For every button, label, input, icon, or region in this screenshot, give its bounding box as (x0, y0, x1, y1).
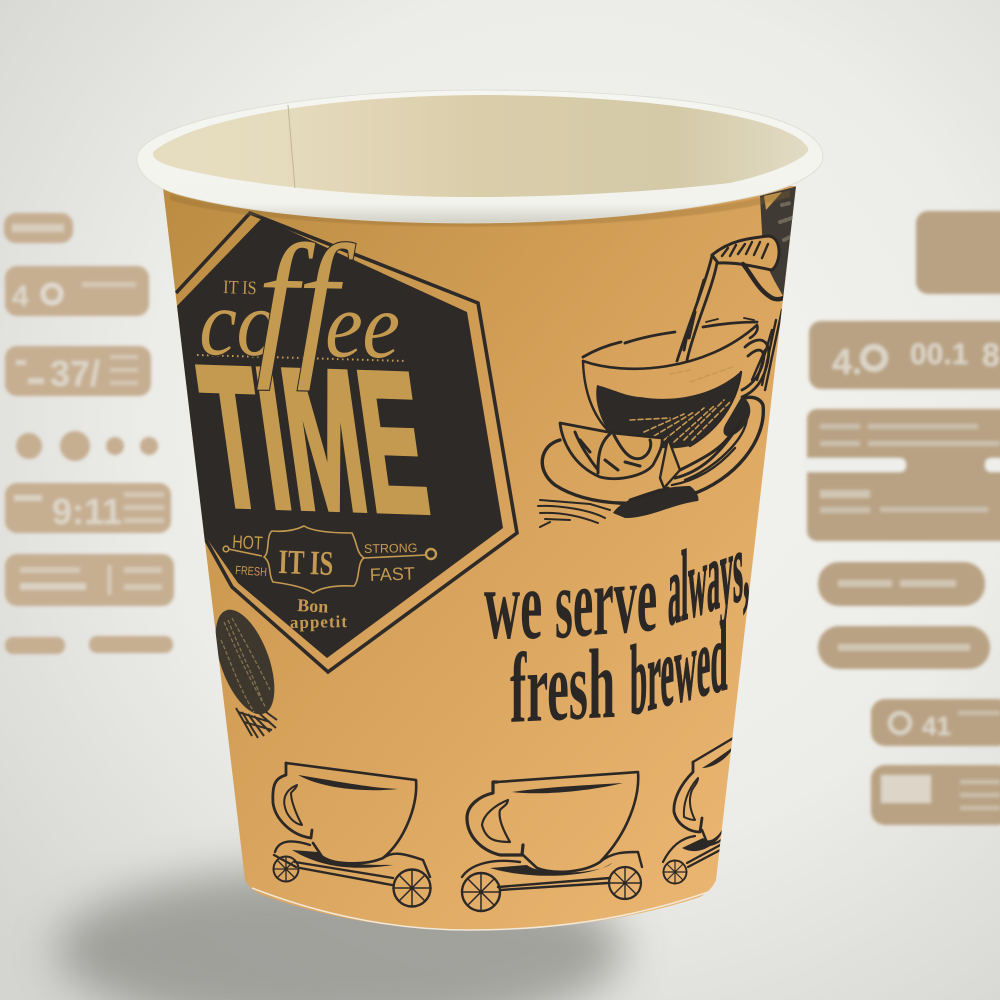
connector line right (364, 555, 426, 558)
cup handle (742, 340, 769, 397)
label: number 37 (5, 346, 151, 396)
right column of blurred labels (800, 211, 1000, 825)
spout hatching (722, 242, 768, 258)
label: large figures: 00.1 (910, 338, 968, 371)
icon: coffee bean (216, 610, 278, 738)
coffee line (702, 746, 734, 768)
bowl outline (286, 763, 416, 863)
saucer shadow (490, 863, 612, 876)
label: number 11: 9:11 (52, 491, 122, 532)
coffee line (512, 783, 623, 793)
bean engraving (221, 618, 270, 712)
bean tail hatching (236, 708, 277, 738)
label: text block with white bar (800, 409, 1000, 541)
wheel left (274, 856, 298, 882)
cup bottom edge highlight (252, 888, 708, 930)
illustration: coffee poured into cup (538, 186, 798, 527)
pitcher spout (712, 236, 779, 270)
cup icon on wheels: left (273, 763, 430, 906)
shading by the cup edge (752, 310, 782, 390)
shadow under the rim (170, 190, 790, 227)
small ribbon badge (223, 526, 436, 593)
paper cup (137, 90, 823, 930)
coffee highlights (630, 366, 735, 442)
wheel right (394, 870, 430, 906)
word: serve: serve (555, 541, 657, 660)
saucer dark band (723, 396, 750, 436)
dotted divider (197, 355, 406, 361)
pitcher speckle (780, 203, 792, 240)
label: number 11 (5, 483, 171, 533)
pouring stream (677, 256, 717, 361)
pitcher opening (764, 192, 782, 210)
saucer inner line (672, 418, 747, 485)
text: TIME: TIME (190, 325, 438, 556)
word: brewed: brewed (630, 601, 728, 738)
handle outer (674, 762, 702, 832)
pitcher body (760, 186, 798, 300)
pill: caption two (818, 626, 990, 669)
label: two text columns (5, 554, 174, 606)
handle outer (273, 763, 312, 838)
cup shadow on the table (55, 866, 625, 1000)
text: coffee: coffee (198, 211, 402, 393)
text: HOT: HOT (232, 531, 263, 554)
handle outer (467, 782, 523, 855)
word: we: we (484, 551, 542, 661)
two small pills (5, 636, 173, 654)
label: icon and caption: 4 (12, 280, 29, 313)
badge: coffee time hexagon (176, 211, 517, 672)
label: large figures: 8 (982, 337, 1000, 373)
label: number 37: 37/ (50, 353, 100, 394)
label: icon and caption (5, 266, 149, 316)
wheel left (462, 873, 500, 911)
handle inner (482, 800, 510, 842)
label: icons and caption: 41 (922, 711, 951, 741)
cup bowl (583, 361, 741, 446)
printed artwork (176, 186, 798, 911)
text: STRONG: STRONG (364, 541, 418, 556)
cup rim (137, 90, 823, 223)
lemon marks (575, 432, 651, 473)
handle inner (684, 778, 698, 820)
cup icon on wheels: centre (462, 772, 642, 911)
word: fresh: fresh (510, 629, 615, 745)
label: large figures: 4. (832, 341, 862, 382)
label pill: top left (4, 213, 73, 243)
saucer shadow (682, 826, 724, 851)
text: it is: IT IS (223, 276, 257, 298)
text: IT IS large: IT IS (278, 543, 334, 583)
connector end right (426, 549, 436, 559)
bean body (216, 610, 274, 714)
label: icons and caption (871, 699, 1000, 746)
bowl outline (693, 737, 735, 845)
word: always,: always, (668, 508, 750, 647)
leaf detail (630, 420, 742, 500)
saucer shadow (292, 850, 393, 868)
ribbon outline (264, 526, 364, 593)
cup rim top strokes (583, 322, 757, 357)
text: bon: Bon (297, 595, 329, 617)
wheel right (609, 867, 641, 899)
hexagon outer line (176, 213, 517, 672)
cup rim small strokes (706, 318, 754, 322)
handle inner (284, 785, 302, 825)
slogan line one (484, 508, 750, 661)
cup body (163, 186, 796, 930)
table hatching (538, 500, 610, 527)
coffee line (298, 775, 398, 790)
interior seam (288, 105, 295, 188)
text: appetit: appetit (290, 612, 348, 632)
lemon slice (560, 423, 662, 479)
label: large figures (809, 321, 1000, 389)
connector end left (223, 546, 229, 552)
cup interior (153, 95, 808, 197)
text: FAST: FAST (369, 563, 415, 585)
leaf over saucer (660, 438, 680, 488)
saucer lines (274, 841, 430, 885)
saucer lines (663, 836, 724, 867)
cup icon on wheels: right (663, 737, 735, 884)
stream hatching (684, 280, 704, 350)
cup front lip (583, 325, 758, 369)
bowl outline (497, 772, 638, 872)
pitcher lower edge (741, 262, 784, 302)
text: FRESH: FRESH (235, 564, 267, 580)
saucer lines (462, 852, 642, 890)
label block: top right (916, 211, 1000, 294)
row of four round icons (16, 431, 158, 461)
saucer (542, 397, 763, 503)
label: bar icon and caption (871, 765, 1000, 825)
hexagon fill (177, 218, 503, 658)
tea leaves (613, 486, 699, 518)
left column of blurred labels (4, 213, 174, 654)
coffee in cup (596, 372, 740, 448)
wheel (663, 860, 687, 884)
pill: caption one (818, 562, 985, 606)
slogan line two (510, 601, 728, 745)
connector line left (228, 549, 262, 556)
